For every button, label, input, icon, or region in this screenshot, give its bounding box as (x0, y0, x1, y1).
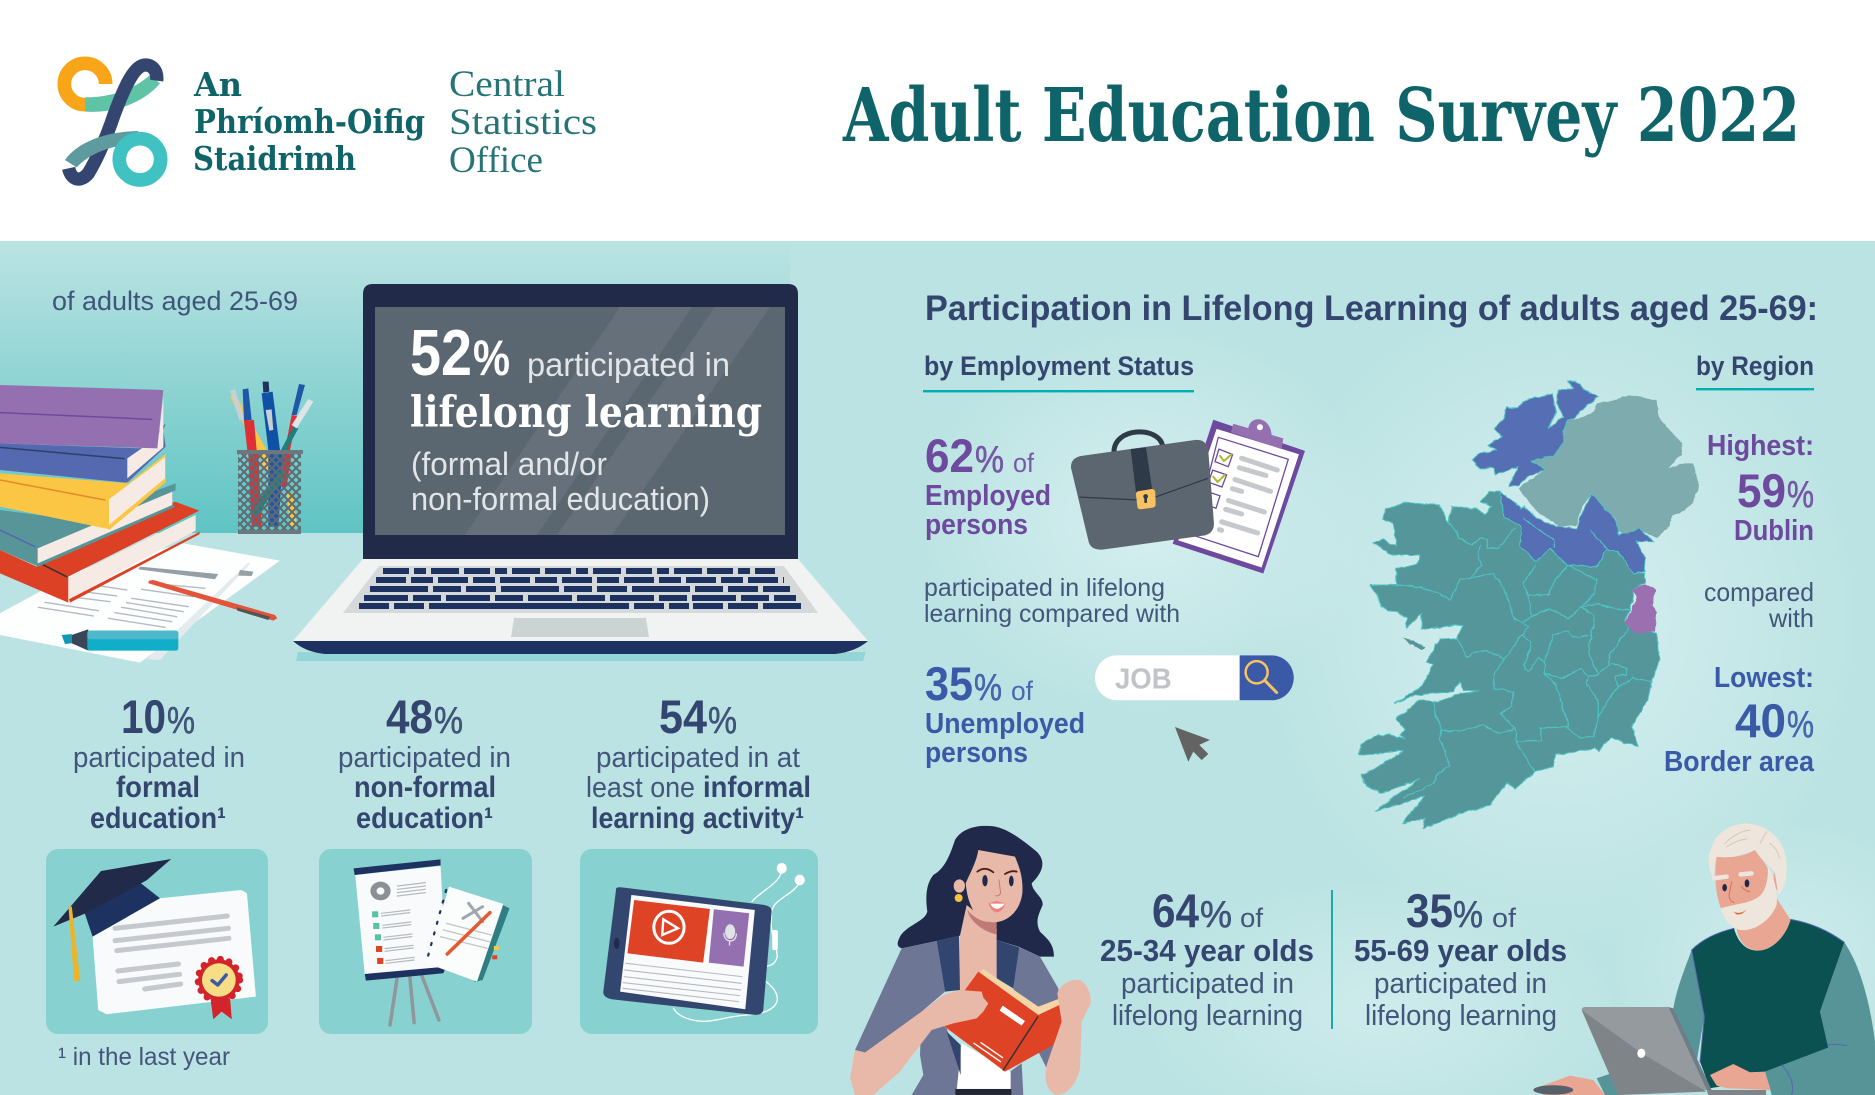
laptop (1582, 1007, 1766, 1095)
logo text: English name (449, 64, 597, 181)
keyboard (343, 566, 818, 613)
stat: employed: persons (925, 509, 1028, 541)
illustration: older man at laptop (1533, 823, 1875, 1095)
stat: informal learning: % (708, 700, 737, 742)
left intro text: of adults aged 25-69 (52, 286, 298, 316)
stat: 25-34 year olds (1100, 884, 1314, 1032)
map: rest of Ireland region (1359, 491, 1660, 828)
map of Ireland (1359, 380, 1699, 828)
stat: informal learning: participated in at (596, 742, 800, 774)
illustration: pencil holder (230, 382, 313, 527)
stat: employed: of (1013, 448, 1034, 478)
stat: formal education: education¹ (90, 802, 226, 835)
hair (898, 826, 1054, 957)
book: yellow (0, 454, 166, 529)
stat: highest region: % (1787, 474, 1814, 516)
subheading: by employment status: by Employment Status (924, 351, 1194, 381)
subheading: by region: by Region (1696, 351, 1814, 381)
headline stat on laptop screen: 52 (410, 316, 472, 389)
stat: highest region: 59 (1737, 464, 1786, 517)
logo text: Irish name: Staidrimh (193, 139, 356, 178)
text: compared with, region: with (1768, 603, 1814, 633)
icon: flip chart (354, 859, 446, 1025)
stat: formal education (73, 690, 245, 835)
map: Dublin, highest (1625, 583, 1657, 634)
stat: lowest region: 40 (1735, 694, 1786, 747)
text: compared with, region: compared (1704, 577, 1814, 607)
neck (1737, 898, 1791, 951)
logo text: Irish name: Phríomh-Oifig (194, 102, 425, 141)
book: red (0, 502, 200, 603)
stat: 55-69 year olds (1354, 884, 1567, 1032)
icon: diploma (93, 890, 256, 1014)
stat: highest region: Highest: (1707, 430, 1814, 462)
text: compared with, region (1704, 577, 1814, 633)
stat: formal education: participated in (73, 742, 245, 774)
stat: 25-34 year olds: % (1200, 894, 1232, 936)
stat: employed: Employed (925, 480, 1051, 512)
stat: informal learning: learning activity¹ (591, 802, 804, 835)
icon: clipboard (1173, 419, 1305, 574)
trackpad (511, 618, 649, 637)
illustration: woman reading (850, 826, 1091, 1095)
headline stat on laptop screen: participated in (527, 346, 730, 383)
stat: 55-69 year olds: of (1492, 903, 1517, 933)
stat: highest region: Dublin (1734, 515, 1814, 547)
jacket (855, 941, 1062, 1095)
text: compared with: learning compared with (924, 600, 1180, 628)
icon: cursor arrow (1175, 727, 1210, 762)
headline stat on laptop screen: non-formal education) (411, 481, 710, 517)
stat: non-formal education: % (434, 700, 463, 742)
icon: notebook and pencil (427, 887, 510, 982)
icon: briefcase (1071, 432, 1214, 550)
panel: formal education icon (46, 849, 268, 1034)
stat: formal education: formal (116, 771, 200, 804)
background panel (0, 241, 1875, 1095)
screen (375, 307, 785, 535)
laptop shadow (296, 652, 866, 661)
map: Border area, lowest (1472, 380, 1654, 573)
lapels (937, 936, 1019, 1075)
stat: non-formal education: non-formal (354, 771, 496, 804)
stat: 55-69 year olds: 55-69 year olds (1354, 933, 1567, 968)
stat: employed (925, 429, 1051, 541)
stat: 55-69 year olds: lifelong learning (1365, 1000, 1557, 1032)
stat: 55-69 year olds: % (1453, 894, 1483, 936)
stat: 25-34 year olds: participated in (1121, 968, 1294, 1000)
logo text: Irish name: An (193, 65, 242, 104)
stat: employed: % (975, 439, 1004, 481)
stat: lowest region: % (1787, 704, 1814, 746)
stat: non-formal education: 48 (386, 690, 433, 743)
icon: seal (198, 959, 240, 1019)
laptop base (293, 559, 868, 654)
illustration: pen (148, 580, 277, 621)
headline stat on laptop screen: lifelong learning (410, 388, 762, 438)
illustration: highlighter (62, 629, 178, 651)
heading: participation in lifelong learning: Participation in Lifelong Learning of adults aged 25-69: (925, 289, 1818, 328)
logo text: English name: Office (449, 140, 543, 181)
stat: unemployed: 35 (925, 657, 973, 710)
stat: non-formal education: participated in (338, 742, 511, 774)
icon: earphones cable (673, 863, 805, 1021)
stat: employed: 62 (925, 429, 974, 482)
book: purple (0, 385, 163, 448)
logo text: Irish name (193, 65, 425, 178)
stat: non-formal education: education¹ (356, 802, 493, 835)
stat: 25-34 year olds: 64 (1152, 884, 1199, 937)
head (1709, 823, 1787, 930)
stat: unemployed: persons (925, 737, 1028, 769)
headline stat on laptop screen: (formal and/or (411, 446, 607, 482)
stat: formal education: 10 (121, 690, 166, 743)
sweater (1692, 919, 1844, 1088)
bezel (363, 284, 798, 559)
stat: unemployed (925, 657, 1085, 769)
stat: 25-34 year olds: lifelong learning (1112, 1000, 1303, 1032)
blouse and chest (955, 905, 1011, 1095)
icon: job search bar (1095, 655, 1294, 700)
logo text: English name: Statistics (449, 102, 597, 143)
arms and hands (850, 980, 1091, 1095)
stat: lowest region: Lowest: (1714, 662, 1814, 694)
stat: highest region (1707, 430, 1814, 547)
logo: CSO symbol (64, 63, 161, 180)
headline stat on laptop screen: % (473, 330, 510, 386)
illustration: desk papers (0, 543, 280, 663)
stat: formal education: % (167, 700, 195, 742)
book (943, 969, 1062, 1072)
pencil holder mesh (237, 450, 303, 534)
stat: non-formal education (338, 690, 511, 835)
icon: tablet (603, 887, 772, 1015)
illustration: stack of books (0, 385, 200, 603)
stat: 25-34 year olds: 25-34 year olds (1100, 933, 1314, 968)
panel: informal learning icon (580, 849, 818, 1034)
stat: unemployed: Unemployed (925, 708, 1085, 740)
headline stat on laptop screen (410, 316, 762, 517)
sleeves (1597, 942, 1875, 1095)
stat: informal learning: informal (703, 771, 811, 804)
panel: non-formal education icon (319, 849, 532, 1034)
stat: 55-69 year olds: participated in (1374, 968, 1547, 1000)
head (954, 850, 1022, 934)
icon: graduation cap (53, 859, 171, 981)
logo text: English name: Central (449, 64, 565, 105)
stat: unemployed: of (1011, 676, 1033, 706)
icon: job search bar: JOB (1115, 663, 1172, 695)
stat: informal learning: 54 (659, 690, 707, 743)
book: blue (0, 423, 166, 483)
stat: 55-69 year olds: 35 (1406, 884, 1453, 937)
stat: informal learning (586, 690, 811, 835)
footnote: ¹ in the last year (58, 1043, 230, 1071)
illustration: laptop (293, 284, 868, 661)
stat: informal learning: least one (586, 772, 695, 804)
hands (1533, 1064, 1771, 1095)
map: Northern Ireland (1518, 396, 1699, 538)
stat: lowest region: Border area (1664, 746, 1815, 778)
stat: 25-34 year olds: of (1240, 903, 1263, 933)
text: compared with: participated in lifelong (924, 574, 1165, 602)
book: teal (0, 483, 176, 567)
text: compared with (924, 574, 1180, 628)
stat: unemployed: % (974, 667, 1002, 709)
stat: lowest region (1664, 662, 1815, 778)
